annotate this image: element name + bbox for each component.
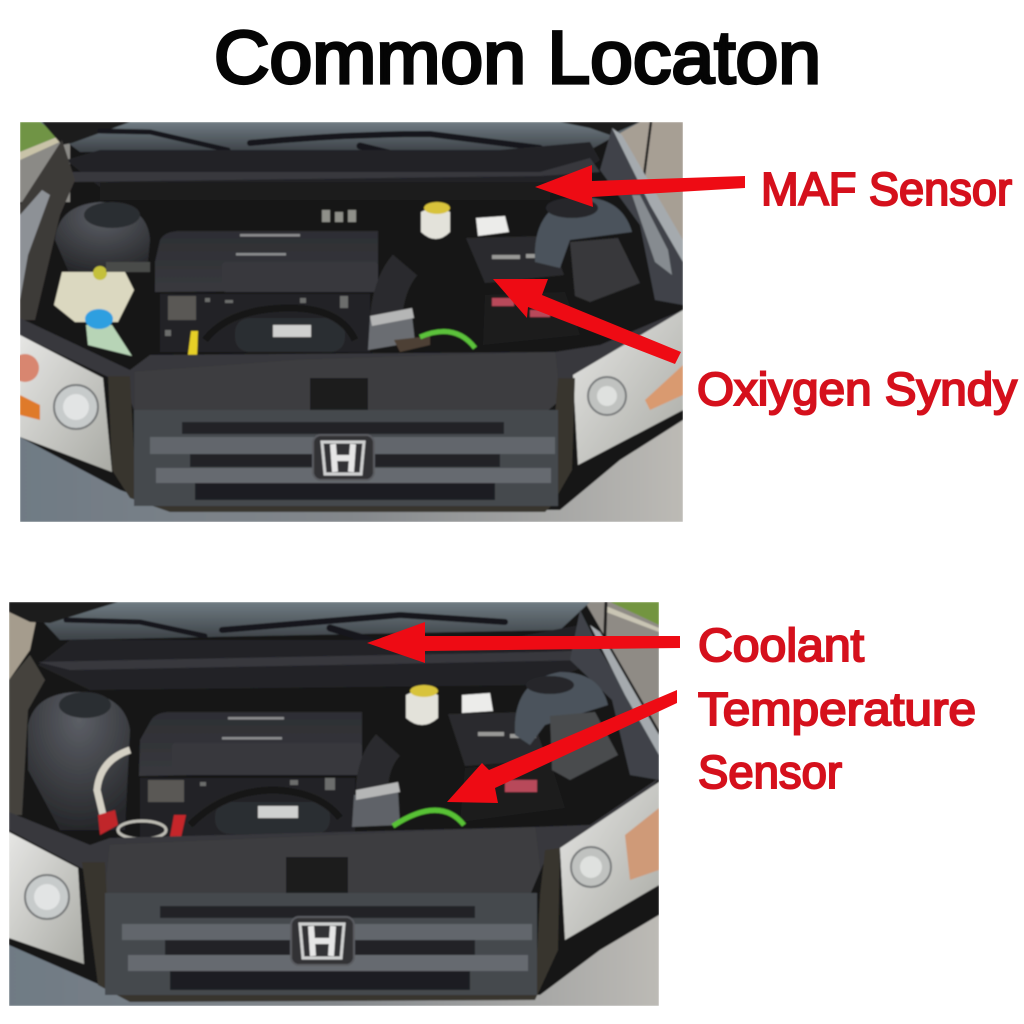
right headlight — [560, 782, 659, 940]
intake hose — [368, 265, 430, 352]
hood corner — [9, 602, 118, 623]
grille surround — [82, 848, 560, 1002]
arrow: to MAF sensor — [535, 165, 745, 207]
wipers — [66, 615, 505, 640]
green hose — [420, 332, 475, 348]
background: pavement right — [620, 122, 683, 240]
right headlight — [573, 310, 683, 465]
title: Common Locaton — [214, 16, 821, 99]
engine lower parts — [160, 294, 370, 352]
left strut tower — [55, 202, 150, 275]
hood prop rod — [604, 602, 606, 660]
washer cap — [476, 216, 509, 236]
battery — [460, 760, 565, 822]
radiator opening — [286, 857, 348, 895]
car body — [9, 915, 659, 1006]
honda logo — [291, 917, 354, 965]
wipers — [98, 128, 542, 150]
red tube — [169, 815, 186, 842]
hood underside — [25, 602, 590, 640]
white hose — [97, 750, 130, 815]
green hose — [393, 810, 464, 826]
yellow tube — [187, 331, 198, 362]
red clamp — [98, 810, 118, 835]
engine cover — [139, 712, 362, 776]
background: left pavement — [9, 611, 37, 680]
left strut tower — [28, 692, 130, 830]
brake fluid reservoir — [421, 202, 450, 239]
car body left — [20, 420, 683, 522]
battery — [490, 296, 552, 318]
cowl — [68, 142, 600, 193]
left fender — [20, 140, 75, 320]
label: Coolant Temperature Sensor: Sensor — [698, 746, 842, 798]
radiator support panel — [9, 778, 659, 895]
radiator opening — [310, 378, 368, 415]
right strut tower — [515, 672, 608, 745]
intake hose — [352, 745, 400, 827]
arrow: to coolant sensor — [447, 690, 677, 803]
brake fluid reservoir — [406, 685, 438, 725]
left headlight — [11, 335, 112, 472]
right strut tower — [535, 197, 632, 268]
left headlight — [9, 832, 84, 964]
grille — [134, 410, 558, 506]
engine lower parts — [118, 778, 355, 839]
label: Oxiygen Syndy: Oxiygen Syndy — [697, 363, 1017, 415]
grille surround — [108, 376, 575, 512]
battery cover — [466, 236, 564, 283]
label: Coolant Temperature Sensor: Coolant — [698, 619, 864, 671]
hood underside — [40, 122, 640, 152]
arrow: upper bottom arrow — [367, 622, 680, 663]
radiator support panel — [20, 310, 683, 413]
right fender — [570, 610, 659, 780]
fuse connectors — [322, 210, 356, 222]
background: pavement and grass right — [585, 602, 659, 730]
panel: top engine bay photo — [11, 122, 683, 522]
cowl — [38, 625, 600, 690]
washer cap — [462, 693, 493, 713]
hood corners — [42, 122, 640, 145]
panel: bottom engine bay photo — [9, 602, 659, 1006]
label: MAF Sensor: MAF Sensor — [761, 163, 1012, 215]
label: Coolant Temperature Sensor — [698, 619, 976, 798]
honda logo — [313, 435, 374, 480]
grille — [105, 893, 537, 995]
engine cover — [155, 231, 378, 292]
left fender — [9, 655, 45, 815]
fuse box — [550, 712, 618, 780]
blue cap bottle — [85, 309, 132, 356]
arrow: to oxygen sensor — [493, 279, 681, 364]
label: Coolant Temperature Sensor: Temperature — [698, 683, 976, 735]
coolant reservoir — [54, 262, 150, 322]
hood prop rod — [644, 122, 651, 176]
right fender — [600, 128, 683, 305]
background: grass and pavement left — [20, 122, 70, 202]
battery cover — [448, 712, 547, 766]
fuse box — [570, 238, 640, 302]
